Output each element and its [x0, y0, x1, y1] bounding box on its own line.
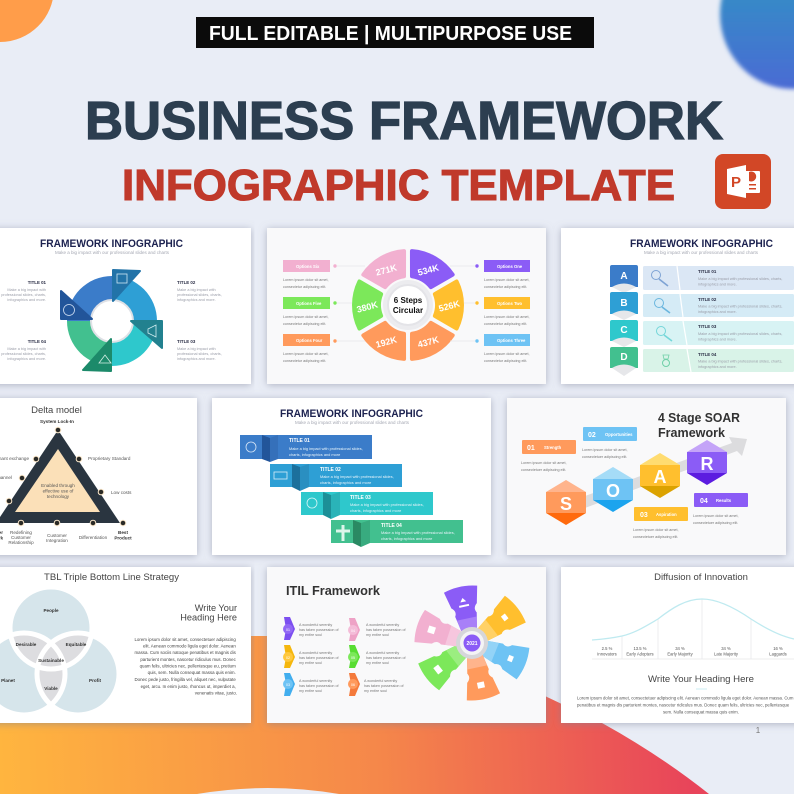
list item 02: has taken possession of — [299, 656, 340, 660]
list item 06: 06 — [351, 683, 355, 687]
option: four: Lorem ipsum dolor sit amet, — [283, 352, 328, 356]
text block: title 04: TITLE 04 — [28, 339, 47, 344]
list item 01: 01 — [286, 628, 290, 632]
text block: title 02: infographics and more. — [177, 298, 216, 302]
node labels: Best — [118, 530, 128, 535]
heading: ITIL Framework — [286, 584, 380, 598]
option: five: Options Five — [296, 301, 322, 306]
card 04 results — [693, 493, 748, 525]
banner 04: Make a big impact with professional slides, — [381, 530, 455, 535]
banner 04 — [331, 520, 463, 547]
banner 04: TITLE 04 — [381, 523, 402, 529]
option: six: consectetur adipiscing elit. — [283, 285, 326, 289]
body text: quis, sem. Nulla consequat massa quis enim. — [148, 670, 236, 675]
list item 02 — [283, 645, 340, 668]
text block: title 04: Make a big impact with — [7, 347, 46, 351]
chart: bell curve: 34 % — [675, 646, 685, 651]
chart: bell curve: 16 % — [773, 646, 783, 651]
centre label: Enabled through — [41, 483, 75, 488]
list item 06 — [348, 673, 405, 696]
panel: 6 steps circular — [267, 228, 546, 384]
card 01 strength — [521, 440, 576, 472]
list item 05: A wonderful serenity — [366, 651, 399, 655]
text block: title 04 — [1, 339, 47, 361]
top banner — [196, 17, 594, 48]
panel: ABCD framework — [561, 228, 794, 384]
list item 05: 05 — [351, 656, 355, 660]
banner 01: Make a big impact with professional slides, — [289, 446, 363, 451]
text block: title 03: infographics and more. — [177, 357, 216, 361]
option: six — [283, 260, 365, 289]
text block: title 01: infographics and more. — [7, 298, 46, 302]
panel: ITIL framework — [267, 567, 546, 723]
banner 03: Make a big impact with professional slides, — [350, 502, 424, 507]
body text: Lorem ipsum dolor sit amet, consectetuer adipiscing elit. Aenean commodo ligula eget dolor. Aenean massa. Cum — [577, 696, 794, 700]
card 02 opportunities: consectetuer adipiscing elit. — [582, 455, 627, 459]
row B: infographics and more. — [698, 310, 737, 314]
node labels: Proprietary Standard — [88, 456, 131, 461]
text block: title 01: Make a big impact with — [7, 288, 46, 292]
body text: elit. Aenean commodo ligula eget dolor. Aenean — [143, 644, 236, 648]
banner 02: TITLE 02 — [320, 467, 341, 473]
chart: bell curve: Early Adopters — [626, 652, 654, 656]
banner 03: charts, infographics and more — [350, 508, 401, 513]
node labels: Customer — [47, 533, 67, 538]
option: one — [450, 260, 530, 289]
option: four: consectetur adipiscing elit. — [283, 359, 326, 363]
body text: eget, arcu. In enim justo, rhoncus ut, imperdiet a, — [141, 684, 236, 689]
node labels: Low costs — [111, 490, 132, 495]
card 04 results: Results — [716, 498, 732, 503]
body text: penatibus et magnis dis parturient montes, nascetur ridiculus mus. Donec quam felis, ultricies nec, pellentesque — [577, 702, 790, 708]
option: three: Options Three — [497, 338, 526, 343]
chart: bell curve: Early Majority — [667, 652, 694, 656]
card 03 aspiration — [633, 507, 688, 539]
row B: TITLE 02 — [698, 297, 717, 302]
hexagon O: O — [606, 481, 620, 501]
option: three: consectetur adipiscing elit. — [484, 359, 527, 363]
row D: D — [620, 352, 628, 363]
list item 01: has taken possession of — [299, 628, 340, 632]
card 03 aspiration: 03 — [640, 512, 648, 519]
chart: bell curve — [592, 599, 794, 659]
body text: venenatis vitae, justo. — [195, 690, 237, 696]
subtitle: infographic template: INFOGRAPHIC TEMPLATE — [122, 161, 675, 210]
panel: stepped banners — [212, 398, 491, 555]
row A: Make a big impact with professional slides, charts, — [698, 277, 782, 281]
chart: six segment wheel: 192K — [375, 334, 398, 350]
banner 04: charts, infographics and more — [381, 536, 432, 541]
heading: write your heading here: Write Your — [195, 603, 237, 613]
option: one: consectetur adipiscing elit. — [484, 285, 527, 289]
chart: venn diagram: People — [43, 608, 59, 613]
list item 04: has taken possession of — [366, 628, 407, 632]
heading: FRAMEWORK INFOGRAPHIC — [630, 238, 773, 250]
card 03 aspiration: Aspiration — [656, 512, 677, 517]
option: three — [450, 334, 530, 363]
panel: four-quadrant circle framework — [0, 228, 251, 384]
chart: six segment wheel: 534K — [417, 262, 440, 278]
banner 03: TITLE 03 — [350, 495, 371, 501]
row A: infographics and more. — [698, 282, 737, 286]
banner 01: TITLE 01 — [289, 438, 310, 444]
card 03 aspiration: consectetuer adipiscing elit. — [633, 535, 678, 539]
body text: sem. Nulla consequat massa quis enim. — [663, 710, 739, 714]
chart: venn diagram — [0, 587, 119, 715]
list item 04: 04 — [351, 629, 355, 633]
card 01 strength: Lorem ipsum dolor sit amet, — [521, 461, 566, 465]
chart: venn diagram: Planet — [1, 678, 15, 683]
list item 05: has taken possession of — [366, 656, 407, 660]
text block: title 02 — [177, 280, 222, 302]
blue corner blob — [720, 0, 794, 89]
list item 06: A wonderful serenity — [364, 679, 397, 683]
text block: title 03: TITLE 03 — [177, 339, 196, 344]
card 02 opportunities — [582, 427, 637, 459]
option: four: Options Four — [296, 338, 323, 343]
orange corner shape — [0, 0, 54, 42]
card 02 opportunities: Lorem ipsum dolor sit amet, — [582, 448, 628, 452]
row C: Make a big impact with professional slides, charts, — [698, 332, 782, 336]
icon tag: navy triangle — [61, 291, 92, 319]
arrow: rising grey arrow — [585, 437, 747, 508]
chart: venn diagram: Viable — [44, 686, 58, 691]
list item 03: has taken possession of — [299, 684, 340, 688]
node labels: Product — [114, 536, 132, 540]
banner 03 — [301, 492, 433, 519]
card 02 opportunities: Opportunities — [605, 432, 633, 437]
centre label: effective use of — [43, 488, 74, 494]
body text: quam felis, ultricies nec, pellentesque eu, pretium — [140, 664, 236, 668]
panel: diffusion of innovation — [561, 567, 794, 723]
heading: TBL Triple Bottom Line Strategy — [44, 572, 179, 583]
list item 04: my entire soul — [366, 633, 389, 637]
chart: six segment wheel: 6 Steps — [394, 296, 423, 305]
hexagon R: R — [700, 454, 714, 474]
list item 06: my entire soul — [364, 689, 387, 693]
body text: Donec pede justo, fringilla vel, aliquet nec, vulputate — [134, 677, 236, 682]
option: three: Lorem ipsum dolor sit amet, — [484, 352, 530, 356]
list item 01: my entire soul — [299, 633, 322, 637]
list item 02: my entire soul — [299, 661, 322, 665]
chart: bell curve: Laggards — [769, 652, 787, 656]
list item 04: A wonderful serenity — [366, 623, 399, 627]
list item 01: A wonderful serenity — [299, 623, 332, 627]
node labels: System Lock-In — [40, 419, 74, 424]
node labels: Relationship — [8, 540, 34, 545]
banner 01: charts, infographics and more — [289, 452, 340, 457]
list item 03: A wonderful serenity — [299, 679, 332, 683]
heading: Diffusion of Innovation — [654, 572, 748, 583]
row A: TITLE 01 — [698, 269, 717, 274]
body text: parturient montes, nascetur ridiculus mus. Donec — [140, 657, 237, 662]
chart: bell curve: 13.5 % — [633, 646, 647, 651]
banner 02 — [270, 464, 402, 491]
heading: 4 Stage SOAR — [658, 410, 741, 425]
card 01 strength: Strength — [544, 445, 562, 450]
option: one: Options One — [497, 264, 523, 269]
list item 01 — [283, 617, 340, 640]
node labels — [0, 419, 132, 545]
text block: title 02: professional slides, charts, — [177, 293, 222, 297]
row D: infographics and more. — [698, 365, 737, 369]
option: six: Lorem ipsum dolor sit amet, — [283, 278, 328, 282]
list item 05 — [348, 645, 407, 668]
row B — [610, 292, 794, 320]
row C: TITLE 03 — [698, 324, 717, 329]
option: five: consectetur adipiscing elit. — [283, 322, 326, 326]
option: five: Lorem ipsum dolor sit amet, — [283, 315, 328, 319]
card 04 results: consectetuer adipiscing elit. — [693, 521, 738, 525]
centre label: technology — [47, 494, 70, 499]
list item 03: my entire soul — [299, 689, 322, 693]
list item 06: has taken possession of — [364, 684, 405, 688]
chart: venn diagram: Equitable — [66, 642, 87, 647]
chart: bell curve: 2.5 % — [602, 646, 613, 651]
icon tag: green triangle — [83, 339, 111, 371]
heading: FRAMEWORK INFOGRAPHIC — [280, 408, 423, 420]
subheading: Write Your Heading Here — [648, 674, 754, 685]
heading: Framework — [658, 425, 726, 440]
card 01 strength: consectetuer adipiscing elit. — [521, 468, 566, 472]
option: four — [283, 334, 365, 363]
row B: Make a big impact with professional slides, charts, — [698, 304, 782, 308]
card 01 strength: 01 — [527, 445, 535, 452]
body text: Lorem ipsum dolor sit amet, consectetuer adipiscing — [134, 637, 236, 642]
text block: title 02: TITLE 02 — [177, 280, 196, 285]
text block: title 03: Make a big impact with — [177, 347, 216, 351]
icon: powerpoint: P — [731, 174, 741, 191]
chart: bell curve: 34 % — [721, 646, 731, 651]
page number: 1 — [756, 726, 761, 735]
hexagon A: A — [654, 467, 666, 487]
banner 01 — [240, 435, 372, 462]
list item 03: 03 — [286, 683, 290, 687]
panel: delta model — [0, 398, 197, 555]
text block: title 02: Make a big impact with — [177, 288, 216, 292]
option: two: Options Two — [497, 301, 522, 306]
node labels: Redefining — [10, 530, 32, 535]
panel: SOAR framework — [507, 398, 786, 555]
list item 04 — [348, 618, 407, 641]
row D: TITLE 04 — [698, 352, 717, 357]
chart: bell curve: Late Majority — [714, 652, 739, 656]
chart: six segment wheel: 271K — [375, 262, 398, 278]
top banner: FULL EDITABLE | MULTIPURPOSE USE — [209, 23, 572, 45]
heading: FRAMEWORK INFOGRAPHIC — [40, 238, 183, 250]
chart: six blade wheel: 2021 — [466, 641, 478, 647]
row B: B — [620, 298, 628, 309]
text block: title 04: professional slides, charts, — [1, 352, 46, 356]
text block: title 03: professional slides, charts, — [177, 352, 222, 356]
row A — [610, 265, 794, 293]
list item 03 — [283, 673, 340, 696]
option: one: Lorem ipsum dolor sit amet, — [484, 278, 530, 282]
row A: A — [620, 271, 628, 282]
text block: title 03 — [177, 339, 222, 361]
hexagon A — [640, 453, 680, 498]
option: two — [464, 297, 530, 326]
node labels: Integration — [46, 538, 68, 543]
list item 02: A wonderful serenity — [299, 651, 332, 655]
heading: Delta model — [31, 405, 82, 416]
gradient background wave — [0, 636, 709, 794]
chart: six segment wheel: 380K — [356, 299, 379, 315]
row C: C — [620, 325, 628, 336]
text block: title 01: professional slides, charts, — [1, 293, 46, 297]
card 04 results: Lorem ipsum dolor sit amet, — [693, 514, 738, 518]
hexagon O — [593, 467, 633, 512]
card 04 results: 04 — [700, 498, 708, 505]
option: two: consectetur adipiscing elit. — [484, 322, 527, 326]
heading: write your heading here: Heading Here — [180, 612, 237, 622]
chart: venn diagram: Desirable — [16, 642, 37, 647]
list item 05: my entire soul — [366, 661, 389, 665]
hexagon S: S — [560, 494, 572, 514]
chart: bell curve: Innovators — [597, 652, 617, 656]
option: six: Options Six — [296, 264, 320, 269]
text block: title 04: infographics and more. — [7, 357, 46, 361]
card 03 aspiration: Lorem ipsum dolor sit amet, — [633, 528, 678, 532]
list item 02: 02 — [286, 656, 290, 660]
subheading: Make a big impact with our professional slides and charts — [644, 250, 759, 255]
chart: quadrant ring — [61, 270, 162, 371]
node labels: Customer — [11, 535, 31, 540]
chart: venn diagram: Profit — [89, 678, 101, 683]
icon: powerpoint — [715, 154, 771, 209]
chart: six blade wheel — [412, 583, 532, 703]
accent line — [696, 688, 707, 690]
chart: delta triangle — [0, 427, 126, 526]
text block: title 01: TITLE 01 — [28, 280, 47, 285]
hexagon R — [687, 440, 727, 485]
panel: TBL triple bottom line — [0, 567, 251, 723]
row C — [610, 320, 794, 347]
chart: venn diagram: Sustainable — [38, 658, 64, 663]
subheading: Make a big impact with our professional slides and charts — [295, 420, 410, 425]
subheading: Make a big impact with our professional slides and charts — [55, 250, 170, 255]
text block: title 01 — [1, 280, 47, 302]
row C: infographics and more. — [698, 338, 737, 342]
chart: six segment wheel: Circular — [393, 306, 423, 315]
chart: six segment wheel: 526K — [438, 298, 461, 314]
title: business framework: BUSINESS FRAMEWORK — [85, 91, 723, 151]
chart: six segment wheel: 437K — [417, 334, 440, 350]
row D: Make a big impact with professional slides, charts, — [698, 360, 782, 364]
heading — [658, 410, 741, 440]
body text: massa. Cum sociis natoque penatibus et magnis dis — [134, 650, 237, 655]
option: two: Lorem ipsum dolor sit amet, — [484, 315, 530, 319]
icon tag: blue triangle — [113, 270, 140, 301]
hexagon S — [546, 480, 586, 525]
card 02 opportunities: 02 — [588, 432, 596, 439]
icon tag: teal triangle — [131, 321, 162, 348]
option: five — [283, 297, 352, 326]
row D — [610, 347, 794, 376]
banner 02: Make a big impact with professional slides, — [320, 474, 394, 479]
chart: six segment wheel — [339, 239, 477, 371]
banner 02: charts, infographics and more — [320, 480, 371, 485]
node labels: Differentiation — [79, 535, 108, 540]
